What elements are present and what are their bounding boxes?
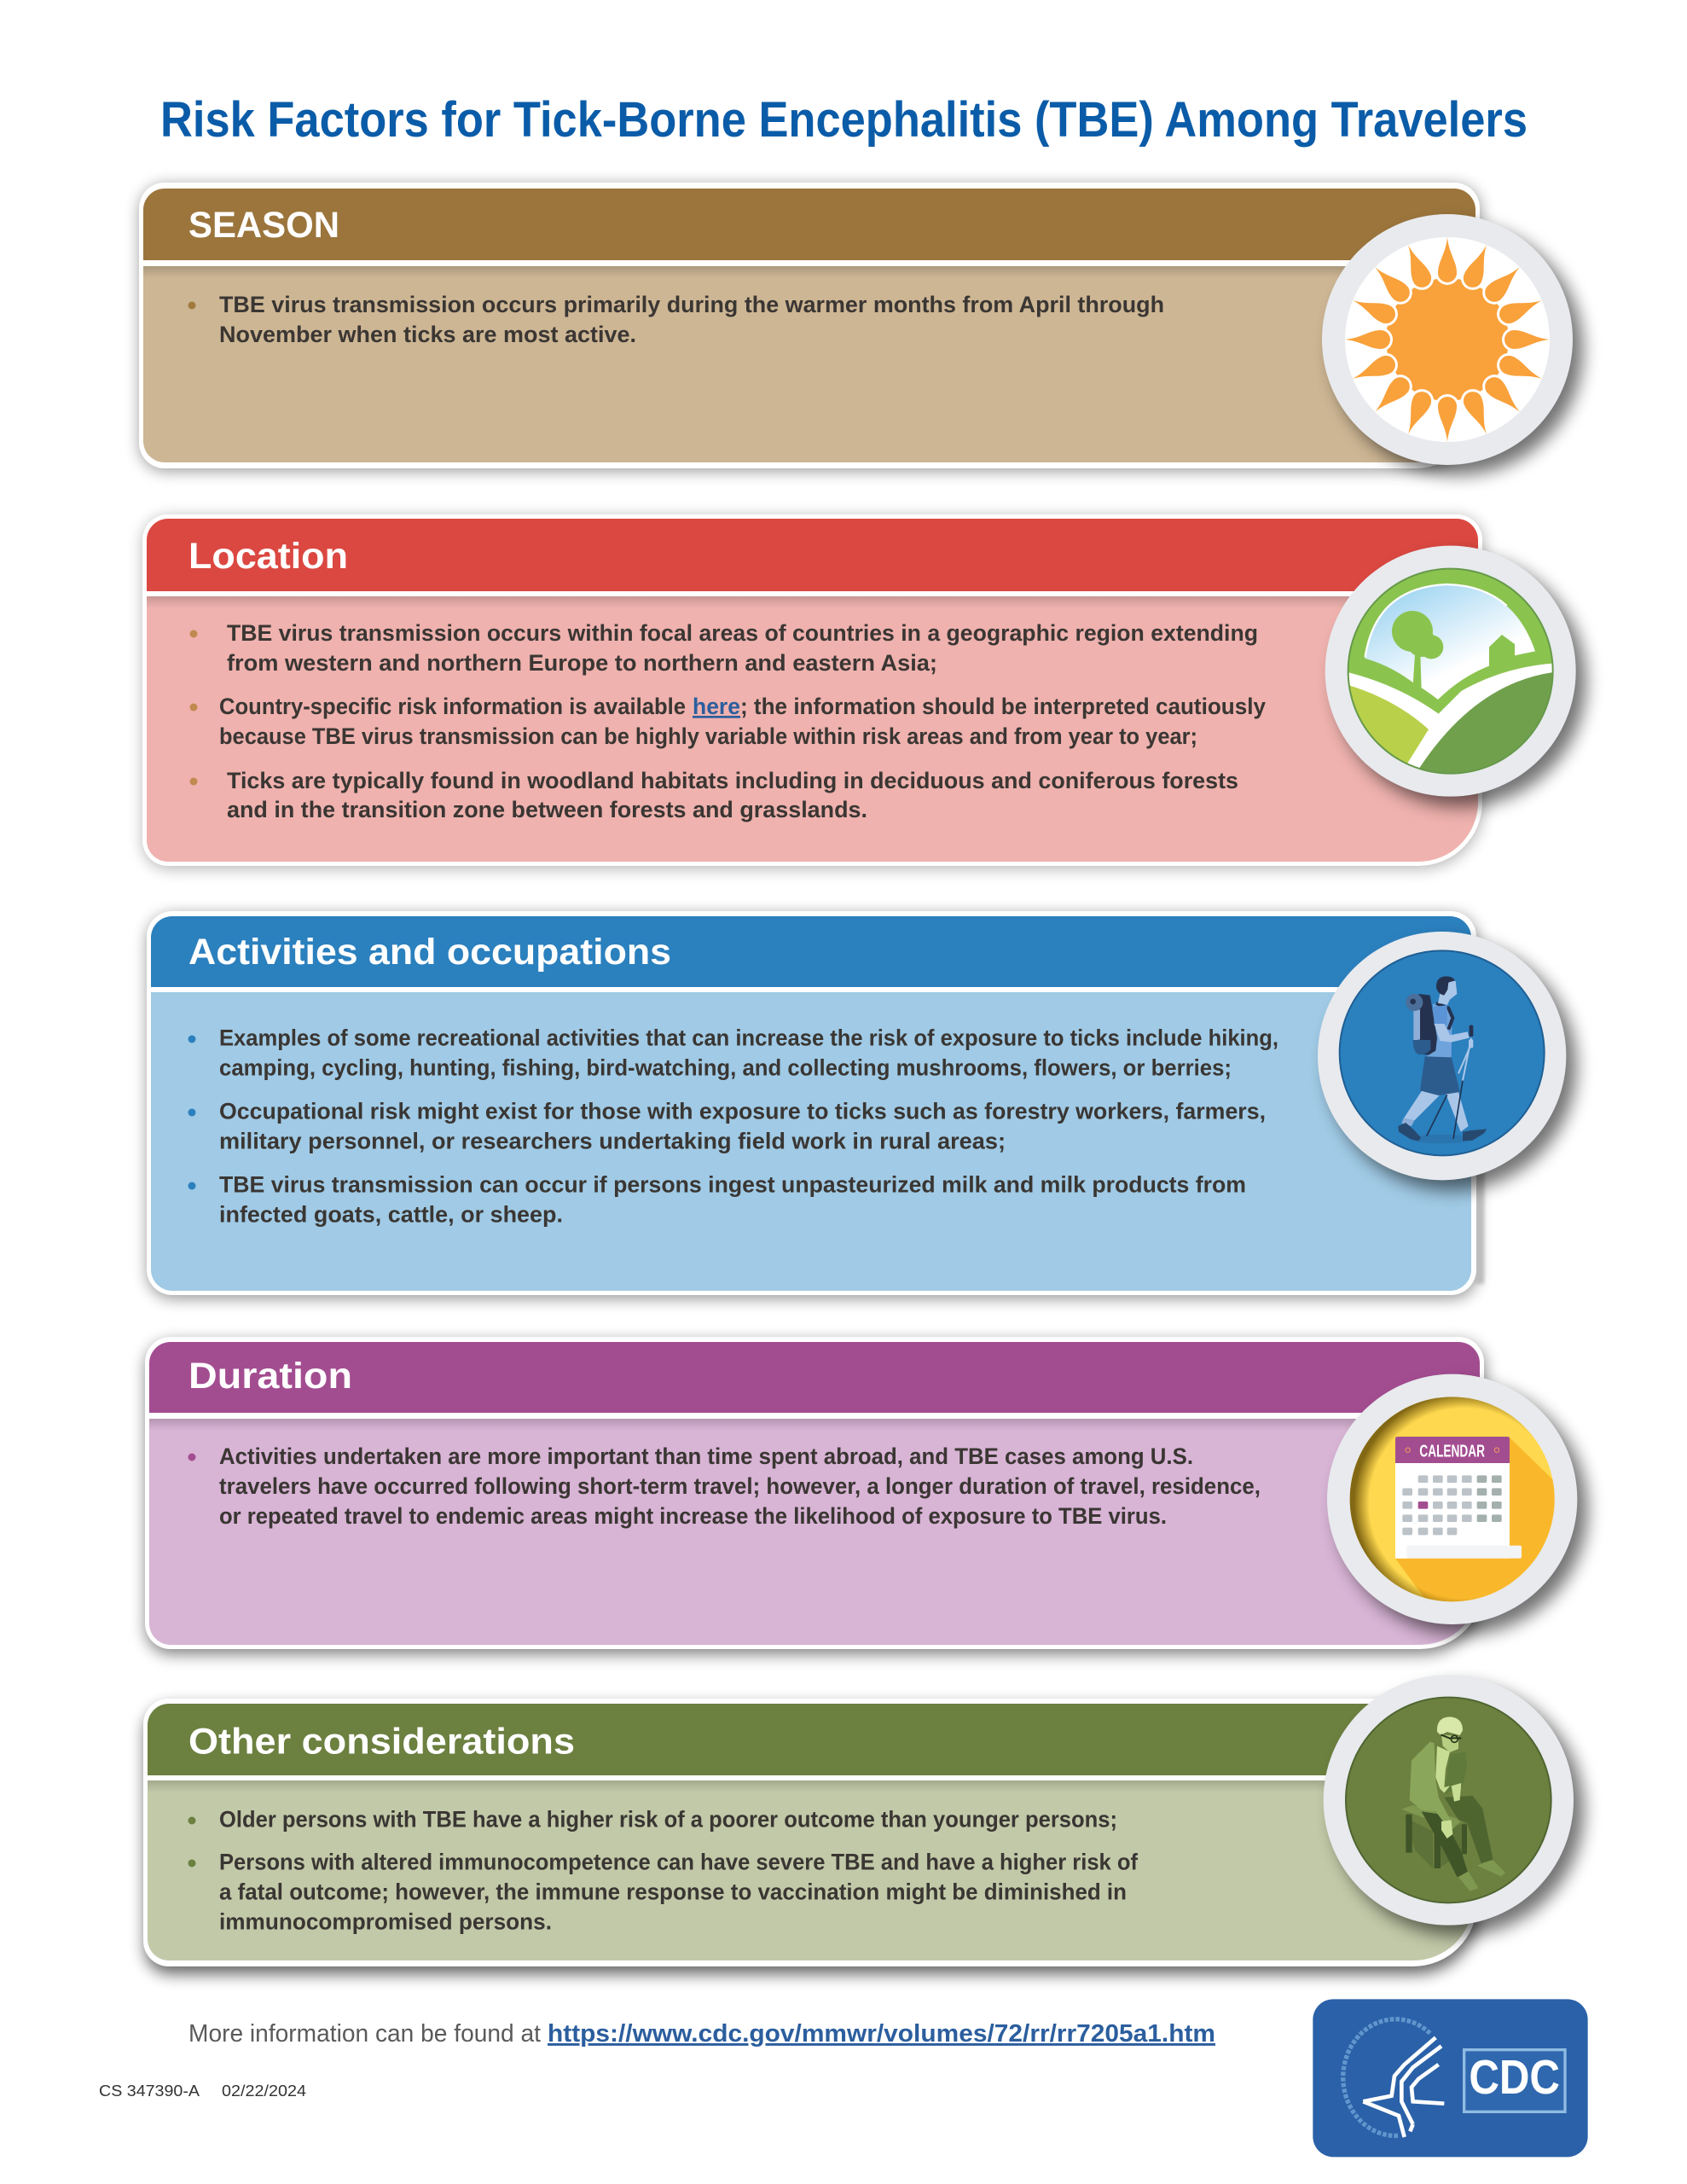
season header [143,189,1475,260]
activities header [151,916,1471,987]
document date: 02/22/2024 [222,2082,306,2100]
other considerations bullet text: Older persons with TBE have a higher risk of a poorer outcome than younger persons; [219,1807,1117,1833]
title: Risk Factors for Tick-Borne Encephalitis (TBE) Among Travelers [160,92,1528,148]
icon: older person seated [1324,1675,1584,1936]
duration bullet text: travelers have occurred following short-term travel; however, a longer duration of travel, residence, [219,1473,1261,1499]
other considerations heading: Other considerations [188,1722,575,1763]
duration bullet text: Activities undertaken are more important than time spent abroad, and TBE cases among U.S. [219,1443,1193,1469]
activities heading: Activities and occupations [188,932,671,973]
logo: CDC: CDC [1469,2051,1560,2105]
document id: CS 347390-A [99,2082,200,2100]
location heading: Location [188,536,348,577]
other considerations header [148,1704,1473,1775]
location bullet text: and in the transition zone between forests and grasslands. [227,797,867,822]
duration heading: Duration [188,1356,352,1397]
icon: hiker [1318,932,1576,1190]
activities bullet text: Examples of some recreational activities that can increase the risk of exposure to ticks include hiking, [219,1025,1278,1051]
location bullet text [189,620,1266,822]
duration bullet text [188,1443,1261,1529]
location bullet text: Country-specific risk information is available [219,694,686,719]
activities bullet text: camping, cycling, hunting, fishing, bird-watching, and collecting mushrooms, flowers, or berries; [219,1054,1232,1080]
location bullet text: TBE virus transmission occurs within focal areas of countries in a geographic region extending [227,620,1258,646]
activities bullet text: military personnel, or researchers undertaking field work in rural areas; [219,1128,1006,1153]
icon: calendar [1327,1374,1587,1635]
other considerations bullet text: a fatal outcome; however, the immune response to vaccination might be diminished in [219,1879,1127,1904]
panel: location [142,514,1586,868]
season heading: SEASON [188,205,339,246]
duration header [149,1342,1480,1413]
duration bullet text: or repeated travel to endemic areas might increase the likelihood of exposure to TBE virus. [219,1503,1167,1529]
other considerations bullet text: immunocompromised persons. [219,1909,552,1935]
location bullet text: here [693,694,740,719]
logo: CDC [1313,1999,1588,2157]
footer link: https://www.cdc.gov/mmwr/volumes/72/rr/rr7205a1.htm [548,2020,1215,2048]
location bullet text: from western and northern Europe to northern and eastern Asia; [227,650,937,676]
activities bullet text [188,1025,1278,1227]
location bullet text: Ticks are typically found in woodland habitats including in deciduous and coniferous forests [227,768,1238,793]
footer more information text: More information can be found at [188,2020,541,2048]
season bullet text: November when ticks are most active. [219,322,636,347]
location bullet text: because TBE virus transmission can be highly variable within risk areas and from year to year; [219,723,1197,749]
location bullet text: ; the information should be interpreted cautiously [740,694,1266,719]
panel: activities and occupations [147,911,1576,1298]
activities bullet text: Occupational risk might exist for those with exposure to ticks such as forestry workers, farmers, [219,1099,1266,1124]
panel: season [139,183,1583,475]
panel: other considerations [143,1675,1584,1974]
icon: landscape [1325,546,1586,807]
activities bullet text: TBE virus transmission can occur if persons ingest unpasteurized milk and milk products from [219,1172,1246,1198]
other considerations bullet text: Persons with altered immunocompetence can have severe TBE and have a higher risk of [219,1850,1139,1875]
season bullet text [188,292,1164,347]
icon: calendar: CALENDAR [1419,1441,1485,1461]
season bullet text: TBE virus transmission occurs primarily during the warmer months from April through [219,292,1164,317]
activities bullet text: infected goats, cattle, or sheep. [219,1201,563,1227]
icon: sun [1322,214,1583,475]
location header [147,519,1478,591]
other considerations bullet text [188,1807,1139,1935]
panel: duration [145,1337,1587,1654]
